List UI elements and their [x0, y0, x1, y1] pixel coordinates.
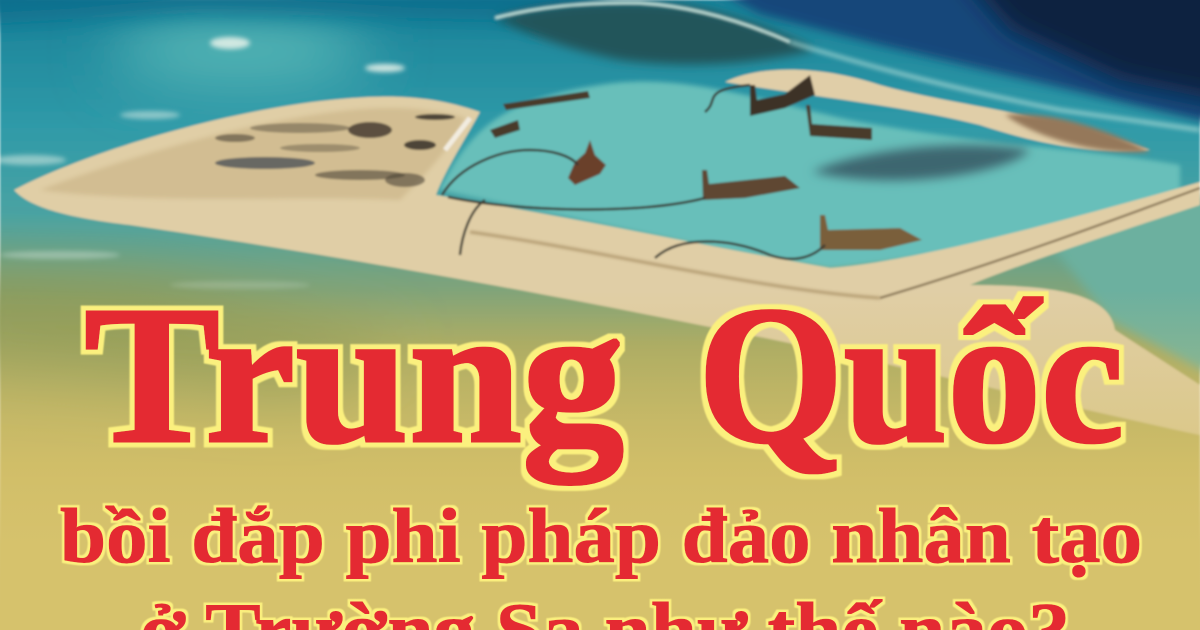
lower fade: [0, 290, 1200, 630]
reef islet at top: [495, 2, 1200, 130]
title: Trung Quốc: Trung: [84, 265, 624, 485]
surf: [0, 37, 405, 289]
dredging ships: [490, 75, 922, 250]
title: Trung Quốc: [84, 265, 1124, 485]
main sand island: [14, 97, 1200, 435]
upper right sand spit: [725, 70, 1150, 152]
subtitle line 1: bồi đắp phi pháp đảo nhân tạo: [60, 493, 1142, 579]
lagoon: [440, 82, 1180, 268]
construction site details: [215, 114, 455, 187]
dredge pipes: [442, 85, 825, 259]
title: Trung Quốc: Quốc: [698, 265, 1124, 484]
